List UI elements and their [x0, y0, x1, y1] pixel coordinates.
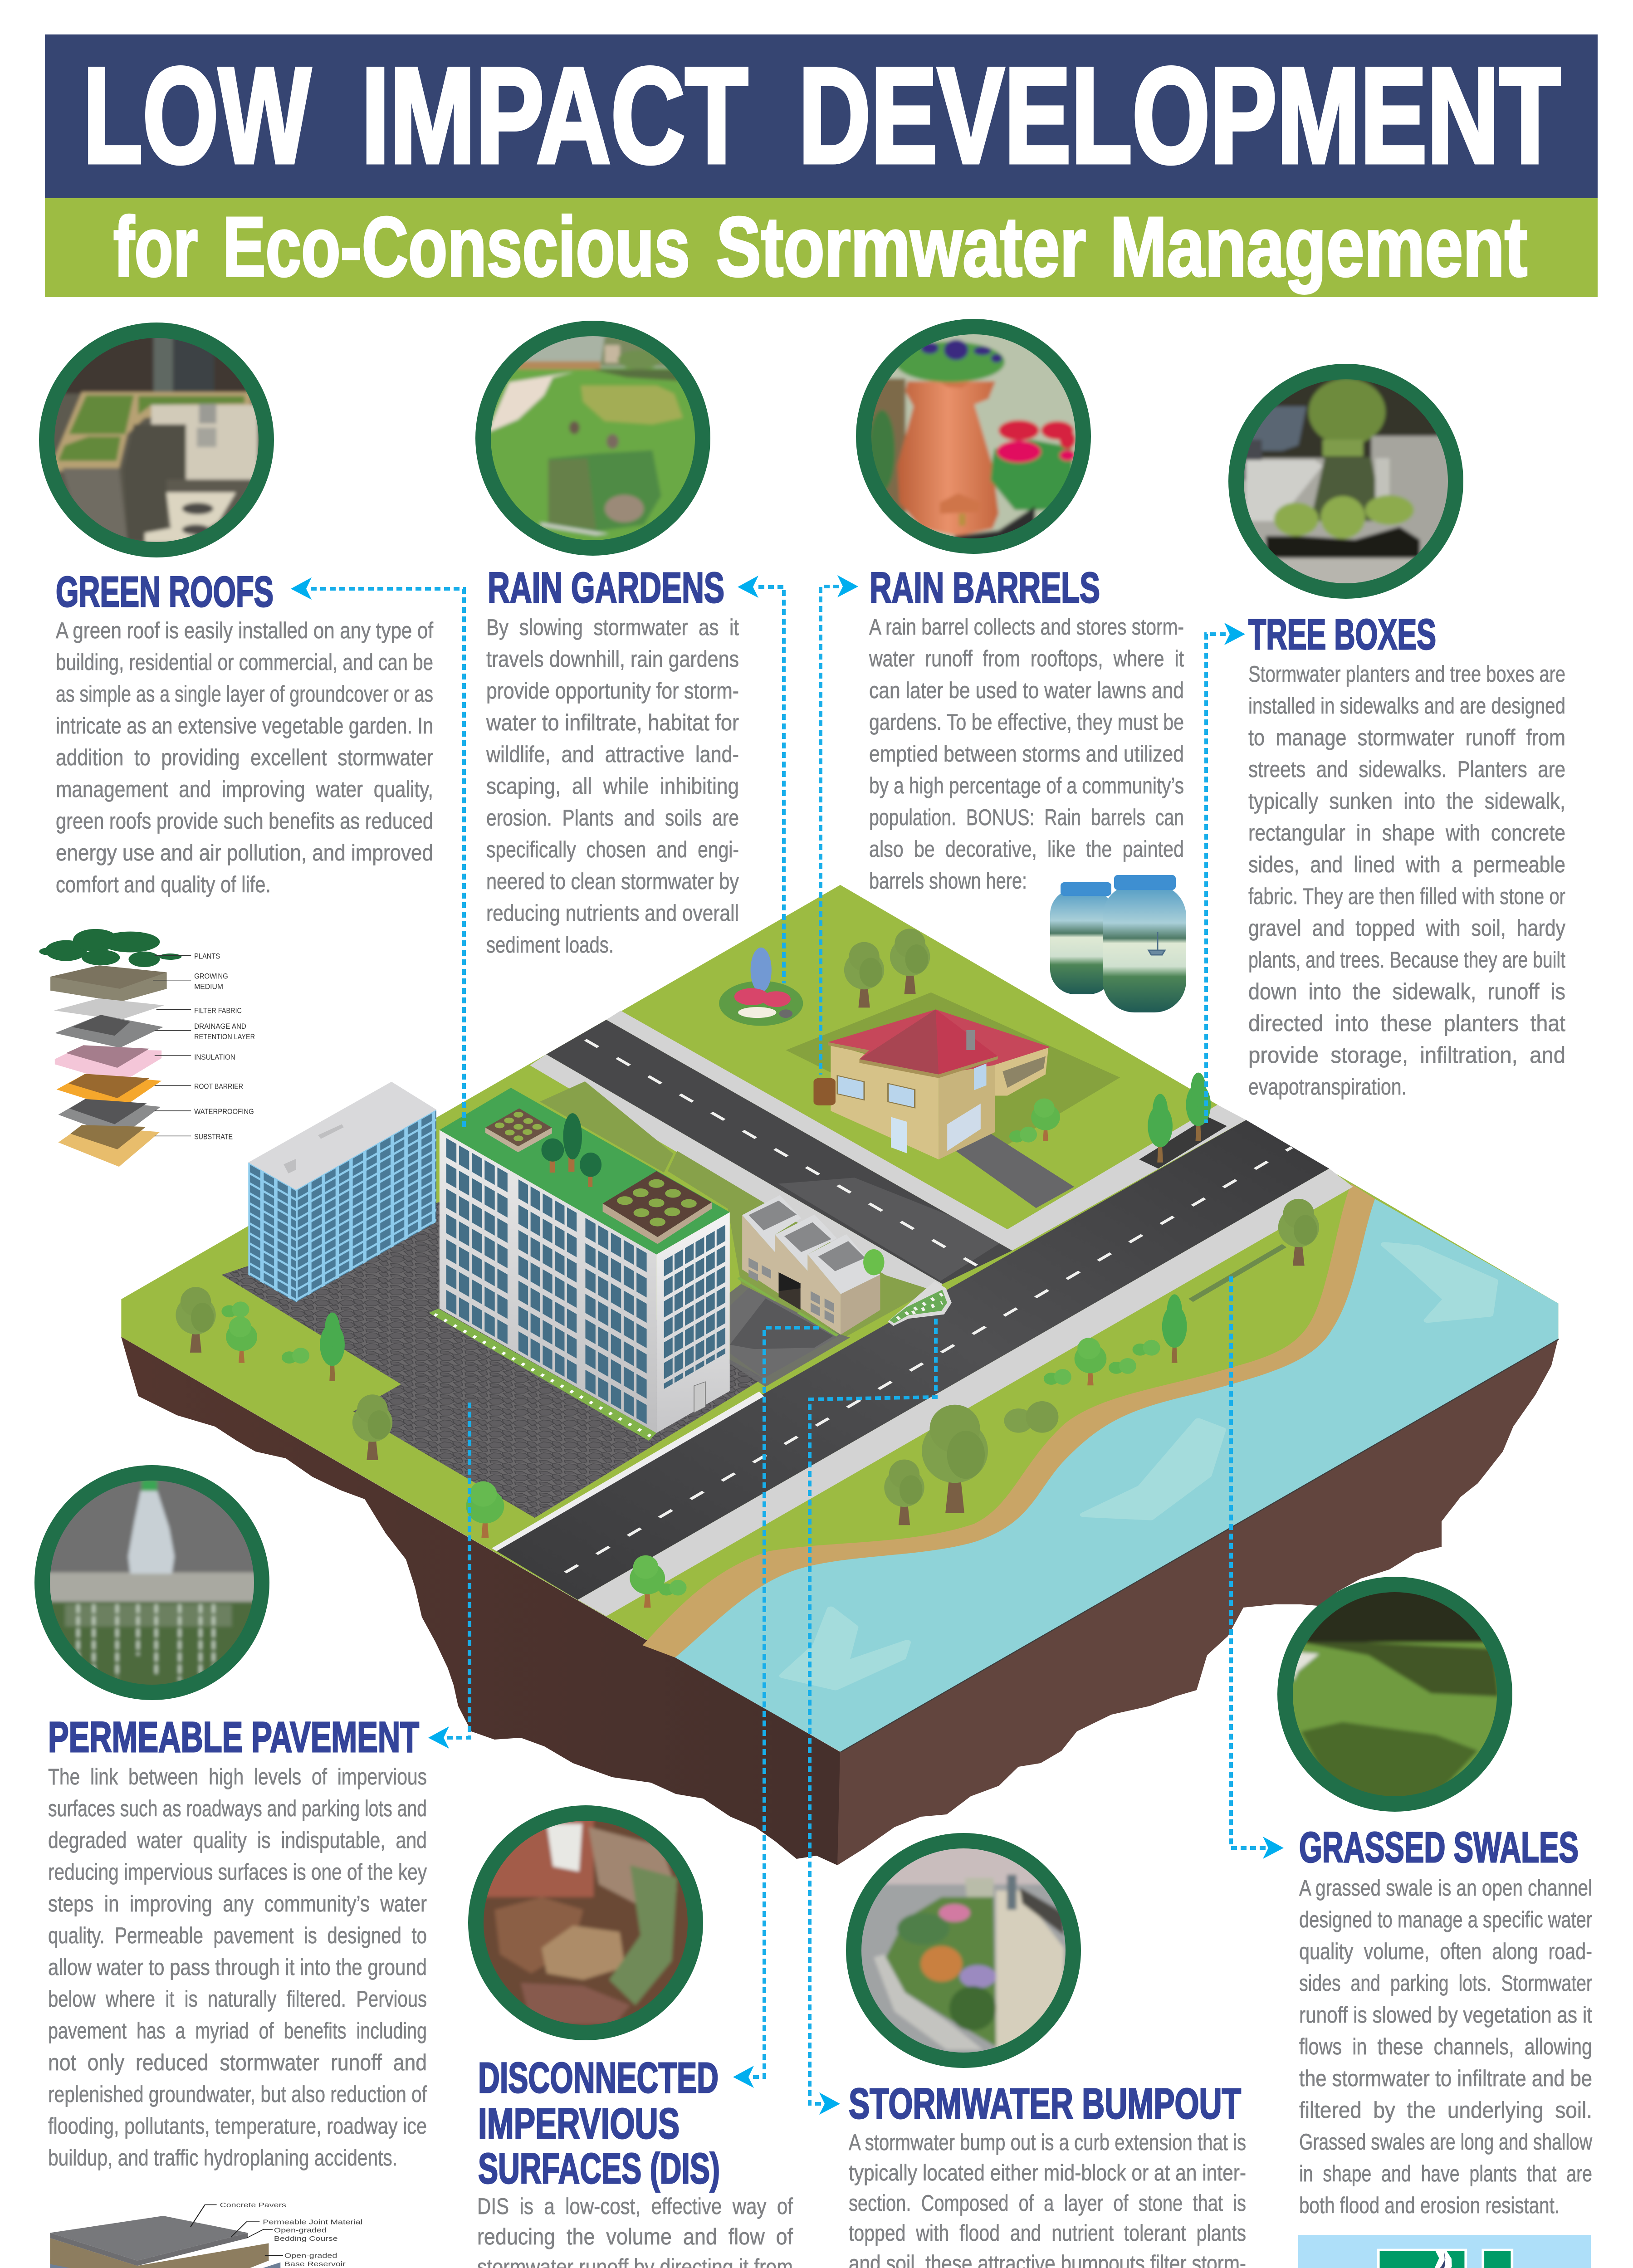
- text: rain gardens: water to infiltrate, habitat for: [486, 710, 739, 735]
- text: permeable pavement: The link between high levels of impervious: [48, 1764, 427, 1789]
- photo: rain gardens: [475, 321, 710, 556]
- text: grassed swales: [1299, 1875, 1593, 2218]
- text: rain gardens: scaping, all while inhibiting: [486, 773, 739, 799]
- text: tree boxes: directed into these planters that: [1248, 1011, 1565, 1036]
- stormwater bumpout: [888, 1281, 952, 1326]
- permeable pavement area: [221, 1202, 764, 1518]
- arrow: permeable pavement: [428, 1726, 449, 1749]
- text: permeable pavement: below where it is naturally filtered. Pervious: [48, 1986, 427, 2012]
- arrow: green roofs: [291, 577, 312, 600]
- grass surface: [121, 885, 1558, 1752]
- text: green roofs: management and improving water quality,: [56, 777, 433, 802]
- text: rain barrels: [869, 614, 1184, 894]
- arrow: tree boxes: [1224, 623, 1245, 645]
- text: permeable pavement: pavement has a myriad of benefits including: [48, 2018, 427, 2043]
- grass swale streak: [1191, 1246, 1284, 1300]
- text: grassed swales: the stormwater to infiltrate and be: [1299, 2066, 1592, 2091]
- heading: tree boxes: TREE BOXES: [1248, 611, 1436, 659]
- heading: disconnected impervious surfaces: IMPERVIOUS: [478, 2100, 680, 2148]
- text: permeable pavement: steps in improving any community’s water: [48, 1891, 427, 1916]
- text: rain barrels: A rain barrel collects and stores storm-: [869, 614, 1184, 640]
- heading: rain gardens: RAIN GARDENS: [488, 564, 724, 612]
- photo: disconnected impervious surfaces: [468, 1805, 708, 2040]
- office building: [429, 1088, 730, 1441]
- dotted connector lines: [311, 587, 1266, 2104]
- house: [828, 1009, 1051, 1159]
- parking shadow: [730, 1298, 833, 1349]
- text: tree boxes: to manage stormwater runoff from: [1248, 725, 1565, 750]
- trees: [176, 929, 1319, 1608]
- green roof layers diagram: GROWING: [194, 972, 228, 981]
- text: tree boxes: evapotranspiration.: [1248, 1074, 1407, 1100]
- permeable pavement diagram: Base Reservoir: [284, 2260, 346, 2268]
- green roof layers diagram: FILTER FABRIC: [194, 1006, 242, 1015]
- permeable pavement diagram: [50, 2201, 362, 2268]
- text: stormwater bumpout: typically located either mid-block or at an inter-: [849, 2160, 1246, 2185]
- text: rain barrels: by a high percentage of a community’s: [869, 773, 1184, 798]
- text: rain gardens: specifically chosen and engi-: [486, 837, 739, 862]
- text: tree boxes: typically sunken into the sidewalk,: [1248, 788, 1565, 814]
- green roof layers diagram: [39, 929, 255, 1167]
- logo mark: [1379, 2250, 1512, 2268]
- water and sand: [643, 1184, 1558, 1752]
- text: rain barrels: also be decorative, like the painted: [869, 836, 1184, 862]
- text: rain barrels: population. BONUS: Rain barrels can: [869, 805, 1184, 830]
- arrow: rain barrels: [837, 575, 858, 597]
- green roof layers diagram: ROOT BARRIER: [194, 1082, 243, 1091]
- text: rain barrels: gardens. To be effective, they must be: [869, 709, 1184, 735]
- text: disconnected impervious surfaces: DIS is a low-cost, effective way of: [477, 2194, 793, 2219]
- house lawn shadow: [786, 992, 1120, 1154]
- text: stormwater bumpout: A stormwater bump out is a curb extension that is: [849, 2130, 1246, 2155]
- arrow: stormwater bumpout: [819, 2092, 840, 2115]
- roads: [492, 1020, 1329, 1600]
- green roof layers diagram: INSULATION: [194, 1053, 235, 1061]
- green roof layers diagram: SUBSTRATE: [194, 1133, 233, 1141]
- permeable pavement diagram: Open-graded: [274, 2226, 327, 2234]
- text: rain gardens: provide opportunity for storm-: [486, 678, 739, 704]
- text: rain gardens: wildlife, and attractive land-: [486, 742, 739, 767]
- text: rain gardens: erosion. Plants and soils are: [486, 805, 739, 831]
- photo: grassed swales: [1277, 1577, 1512, 1812]
- subtitle banner: for: [113, 200, 198, 294]
- photo: permeable pavement: [34, 1465, 269, 1700]
- white green-roof building and solar building: [429, 1081, 952, 1441]
- text: rain gardens: By slowing stormwater as it: [486, 615, 739, 640]
- text: tree boxes: sides, and lined with a permeable: [1248, 852, 1565, 877]
- heading: stormwater bumpout: STORMWATER BUMPOUT: [849, 2080, 1241, 2128]
- text: tree boxes: streets and sidewalks. Planters are: [1248, 757, 1565, 782]
- subtitle banner: [45, 198, 1598, 297]
- text: green roofs: building, residential or commercial, and can be: [56, 650, 433, 675]
- text: permeable pavement: surfaces such as roadways and parking lots and: [48, 1796, 427, 1821]
- text: green roofs: green roofs provide such benefits as reduced: [56, 808, 433, 834]
- text: green roofs: intricate as an extensive vegetable garden. In: [56, 713, 433, 738]
- green roof layers diagram: DRAINAGE AND: [194, 1022, 246, 1031]
- text: permeable pavement: [48, 1764, 427, 2170]
- text: grassed swales: both flood and erosion resistant.: [1299, 2193, 1560, 2218]
- edge line: [840, 1339, 1558, 1752]
- parking: [730, 1287, 845, 1378]
- sidewalks: [492, 1011, 1353, 1616]
- permeable pavement diagram: Concrete Pavers: [220, 2201, 286, 2209]
- text: permeable pavement: buildup, and traffic hydroplaning accidents.: [48, 2145, 397, 2170]
- text: permeable pavement: replenished groundwater, but also reduction of: [48, 2082, 427, 2107]
- solar panel building: [730, 1195, 885, 1387]
- text: permeable pavement: quality. Permeable pavement is designed to: [48, 1923, 427, 1948]
- blue office building: [248, 1082, 436, 1302]
- subtitle banner: Eco-Conscious: [223, 200, 690, 294]
- bumpout planting: [890, 1290, 947, 1323]
- text: stormwater bumpout: section. Composed of a layer of stone that is: [849, 2190, 1246, 2216]
- text: rain barrels: water runoff from rooftops, where it: [869, 646, 1184, 671]
- green roof layers diagram: PLANTS: [194, 952, 220, 961]
- text: rain gardens: travels downhill, rain gardens: [486, 646, 739, 672]
- text: green roofs: addition to providing excellent stormwater: [56, 745, 433, 770]
- photo: stormwater bumpout: [846, 1833, 1081, 2068]
- text: disconnected impervious surfaces: reducing the volume and flow of: [477, 2224, 793, 2249]
- text: green roofs: as simple as a single layer of groundcover or as: [56, 681, 433, 707]
- tree box planter: [1139, 1117, 1227, 1168]
- isometric site: earth right face: [837, 1339, 1558, 1865]
- isometric site: ground surface: [121, 885, 1558, 1752]
- photo: tree boxes: [1228, 364, 1464, 599]
- heading: disconnected impervious surfaces: SURFACES (DIS): [478, 2145, 720, 2193]
- text: tree boxes: gravel and topped with soil, hardy: [1248, 915, 1565, 941]
- text: rain barrels: emptied between storms and utilized: [869, 741, 1184, 767]
- text: rain gardens: reducing nutrients and overall: [486, 900, 739, 926]
- heading: green roofs: GREEN ROOFS: [56, 568, 274, 616]
- title banner: IMPACT: [361, 39, 748, 191]
- text: stormwater bumpout: [848, 2130, 1246, 2268]
- arrow: rain gardens: [738, 576, 758, 598]
- subtitle banner: Management: [1110, 200, 1527, 294]
- permeable pavement diagram: Permeable Joint Material: [263, 2218, 362, 2225]
- text: permeable pavement: not only reduced stormwater runoff and: [48, 2050, 427, 2075]
- text: rain barrels: barrels shown here:: [869, 868, 1027, 894]
- text: rain gardens: [486, 615, 739, 958]
- heading: permeable pavement: PERMEABLE PAVEMENT: [48, 1713, 419, 1761]
- isometric site: earth left face: [121, 1337, 840, 1865]
- text: tree boxes: [1248, 661, 1565, 1100]
- text: stormwater bumpout: topped with flood and nutrient tolerant plants: [849, 2220, 1246, 2246]
- text: tree boxes: rectangular in shape with concrete: [1248, 820, 1565, 846]
- text: rain barrels: can later be used to water lawns and: [869, 678, 1184, 703]
- heading: disconnected impervious surfaces: [478, 2054, 720, 2193]
- building shadows: [540, 1081, 931, 1338]
- heading: disconnected impervious surfaces: DISCONNECTED: [478, 2054, 719, 2102]
- text: disconnected impervious surfaces: [477, 2194, 793, 2268]
- text: tree boxes: down into the sidewalk, runoff is: [1248, 979, 1565, 1004]
- photo: green roofs: [36, 323, 279, 557]
- text: permeable pavement: flooding, pollutants, temperature, roadway ice: [48, 2113, 427, 2139]
- text: tree boxes: provide storage, infiltration, and: [1248, 1042, 1565, 1068]
- heading: rain barrels: RAIN BARRELS: [870, 564, 1100, 612]
- text: permeable pavement: allow water to pass through it into the ground: [48, 1955, 427, 1980]
- painted rain barrels: [1050, 875, 1186, 1012]
- driveway: [955, 1132, 1074, 1208]
- green roof layers diagram: WATERPROOFING: [194, 1107, 254, 1116]
- logo panel: [1298, 2235, 1591, 2268]
- permeable pavement diagram: Bedding Course: [274, 2235, 338, 2242]
- title banner: [45, 34, 1598, 198]
- text: tree boxes: installed in sidewalks and are designed: [1248, 693, 1565, 719]
- permeable pavement diagram: Open-graded: [284, 2252, 337, 2259]
- text: tree boxes: fabric. They are then filled with stone or: [1248, 884, 1565, 909]
- photo: rain barrels: [856, 319, 1091, 554]
- text: rain gardens: neered to clean stormwater by: [486, 869, 739, 894]
- text: green roofs: energy use and air pollution, and improved: [56, 840, 433, 865]
- text: grassed swales: filtered by the underlying soil.: [1299, 2097, 1592, 2123]
- green roof layers diagram: MEDIUM: [194, 982, 223, 991]
- subtitle banner: Stormwater: [716, 200, 1086, 294]
- text: permeable pavement: reducing impervious surfaces is one of the key: [48, 1859, 427, 1885]
- arrow: disconnected impervious surfaces: [733, 2066, 754, 2088]
- text: green roofs: [56, 618, 433, 897]
- green roof layers diagram: RETENTION LAYER: [194, 1032, 255, 1041]
- flower garden: [719, 948, 803, 1026]
- arrow: grassed swales: [1263, 1837, 1284, 1859]
- text: green roofs: comfort and quality of life.: [56, 872, 271, 897]
- text: permeable pavement: degraded water quality is indisputable, and: [48, 1828, 427, 1853]
- text: green roofs: A green roof is easily installed on any type of: [56, 618, 433, 643]
- text: rain gardens: sediment loads.: [486, 932, 614, 958]
- rain barrel on house: [813, 1078, 836, 1105]
- title banner: LOW: [83, 39, 312, 191]
